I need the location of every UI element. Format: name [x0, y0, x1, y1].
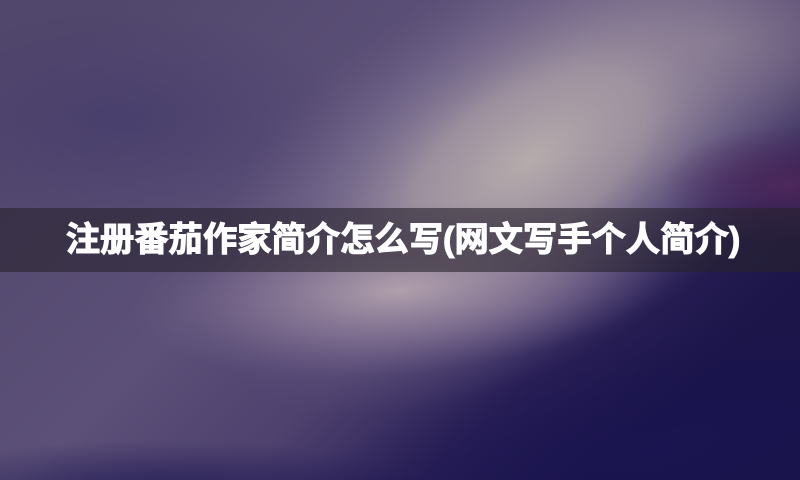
title: 注册番茄作家简介怎么写(网文写手个人简介): [66, 221, 740, 259]
title band: [0, 208, 800, 272]
